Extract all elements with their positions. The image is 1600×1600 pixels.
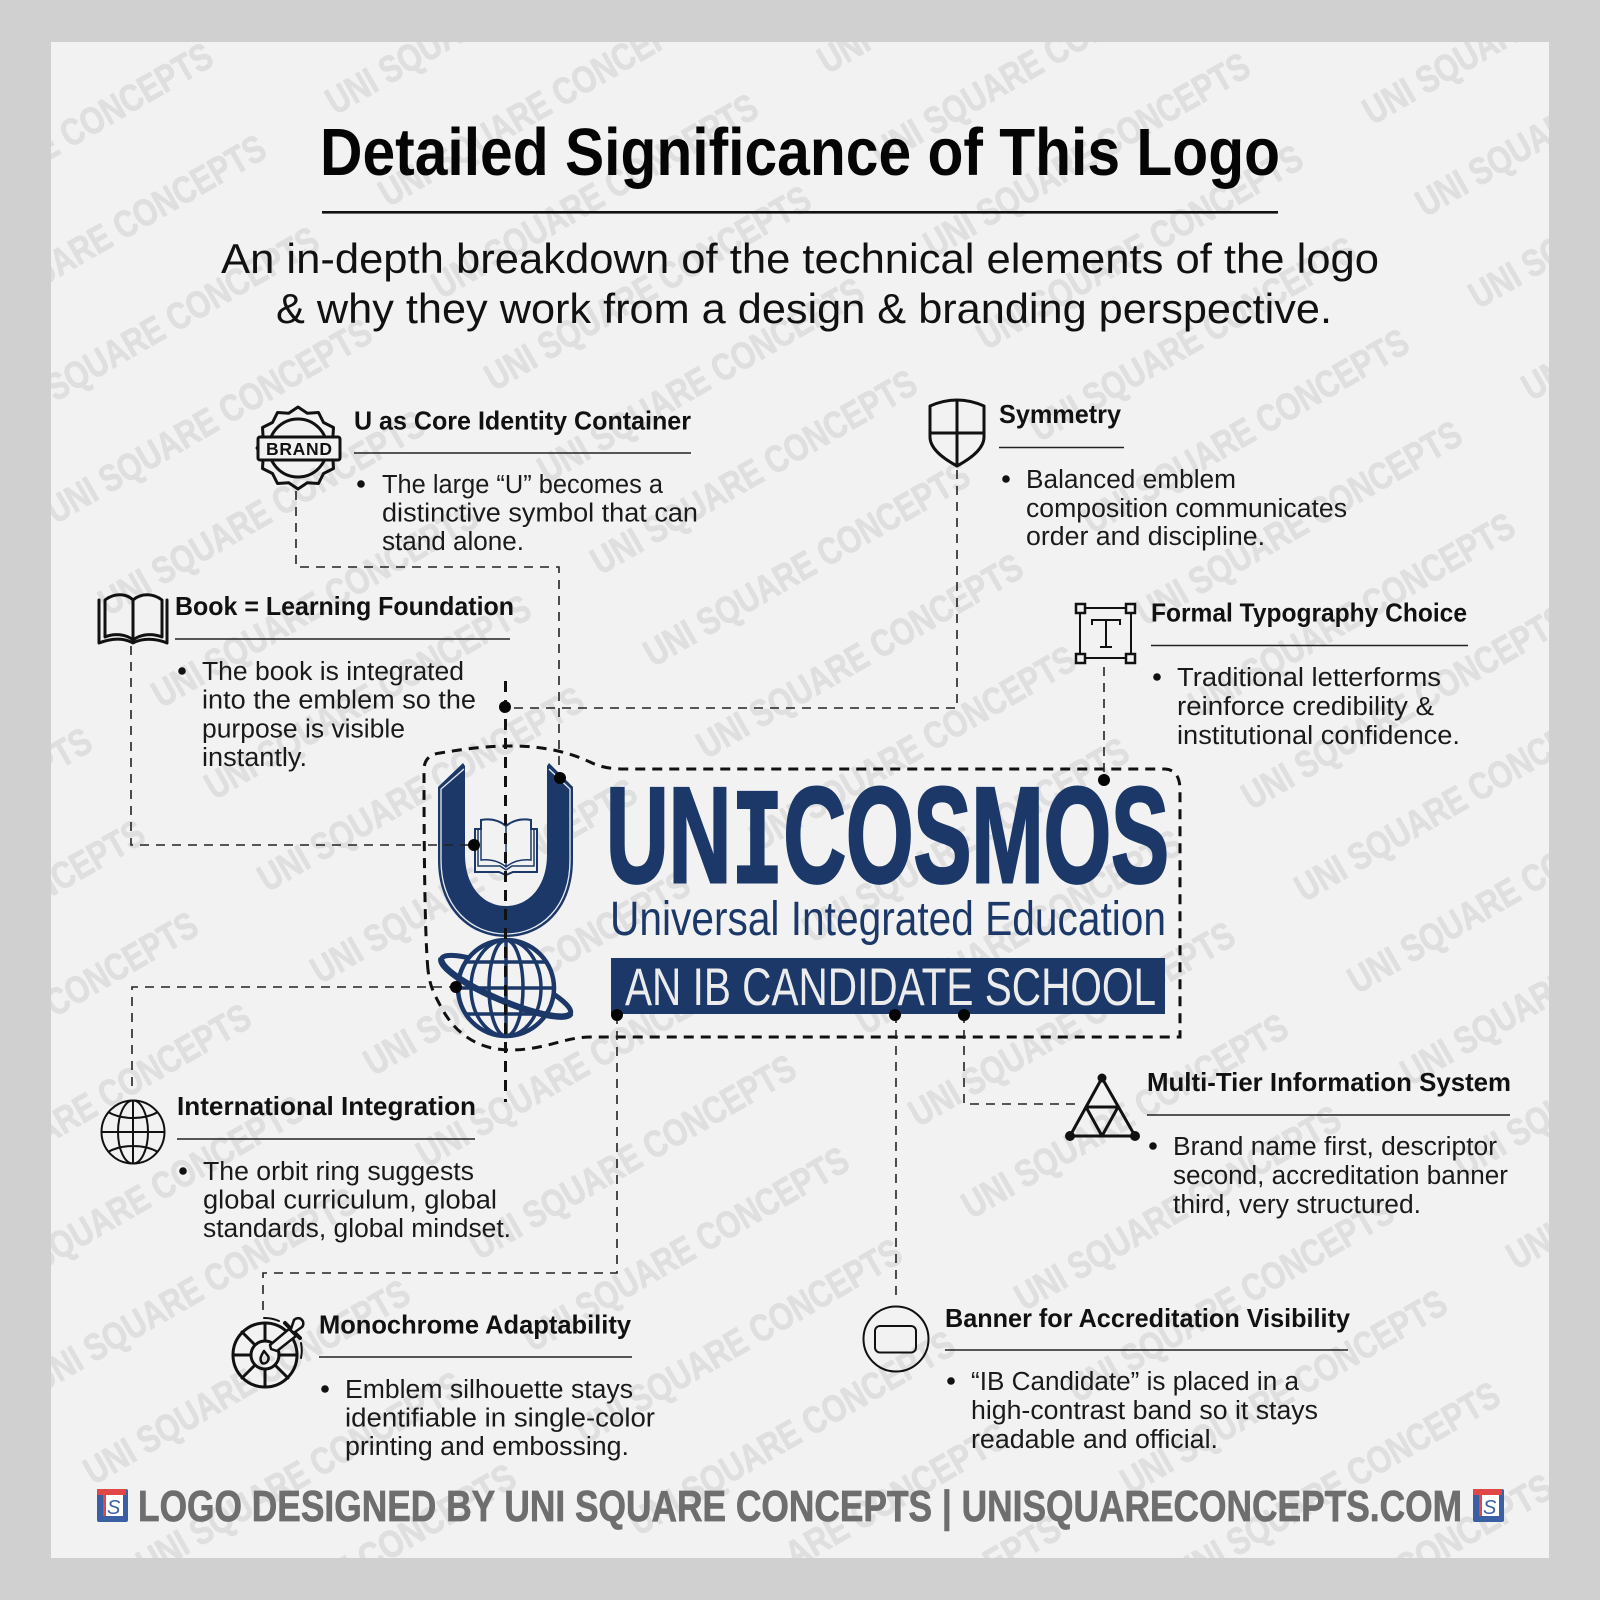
emblem: open book: [475, 819, 537, 875]
heading: Multi-Tier Information System: [1147, 1067, 1511, 1097]
subtitle: An in-depth breakdown of the technical elements of the logo: [221, 235, 1379, 282]
centre axis: [504, 681, 507, 1102]
bullet text: The large “U” becomes a: [382, 471, 664, 499]
callout: Multi-Tier Information System: [1065, 1067, 1511, 1219]
watermark pattern: UNI SQUARE CONCEPTS: [1129, 413, 1470, 634]
bullet text: standards, global mindset.: [203, 1215, 511, 1243]
watermark pattern: UNI SQUARE CONCEPTS: [622, 1323, 962, 1544]
bullet text: purpose is visible: [202, 715, 405, 743]
watermark pattern: UNI SQUARE CONCEPTS: [357, 863, 698, 1084]
bullet text: institutional confidence.: [1177, 722, 1460, 750]
bullet text: readable and official.: [971, 1426, 1218, 1454]
watermark pattern: UNI SQUARE CONCEPTS: [463, 1047, 804, 1268]
wordmark: UNICOSMOS: UNICOSMOS: [606, 759, 1169, 923]
watermark pattern: UNI SQUARE CONCEPTS: [690, 546, 1030, 767]
watermark pattern: UNI SQUARE CONCEPTS: [849, 822, 1190, 1043]
watermark pattern: UNI SQUARE CONCEPTS: [637, 454, 978, 675]
watermark pattern: UNI SQUARE CONCEPTS: [584, 362, 924, 583]
watermark pattern: UNI SQUARE CONCEPTS: [251, 679, 592, 900]
icon: colour wheel with dropper: [233, 1318, 303, 1387]
callout: Book = Learning Foundation: [99, 591, 514, 772]
watermark pattern: UNI SQUARE CONCEPTS: [1061, 1190, 1402, 1411]
watermark pattern: UNI SQUARE CONCEPTS: [1167, 1374, 1508, 1595]
callout: Monochrome Adaptability: [233, 1310, 656, 1461]
bullet text: into the emblem so the: [202, 687, 476, 715]
watermark pattern: UNI SQUARE CONCEPTS: [304, 771, 644, 992]
bullet text: [1153, 664, 1460, 750]
watermark pattern: UNI SQUARE CONCEPTS: [1076, 321, 1416, 542]
watermark pattern: UNI SQUARE CONCEPTS: [1114, 1282, 1454, 1503]
watermark pattern: UNI SQUARE CONCEPTS: [410, 955, 750, 1176]
bullet text: composition communicates: [1026, 495, 1347, 523]
icon: type frame: [1076, 604, 1135, 663]
bullet text: Emblem silhouette stays: [345, 1376, 633, 1404]
title: Detailed Significance of This Logo: [320, 115, 1280, 190]
watermark pattern: CONCEPTS: [1388, 1466, 1560, 1590]
watermark pattern: UNI SQUARE CONCEPTS: [478, 178, 818, 399]
watermark pattern: UNI SQUARE CONCEPTS: [743, 638, 1084, 859]
heading: Monochrome Adaptability: [319, 1310, 632, 1340]
heading: Banner for Accreditation Visibility: [945, 1303, 1351, 1333]
logo: [436, 759, 1169, 1036]
watermark pattern: UNI SQUARE CONCEPTS: [92, 403, 432, 624]
bullet text: Brand name first, descriptor: [1173, 1133, 1498, 1161]
watermark pattern: UNI SQUARE CONCEPTS: [145, 495, 486, 716]
bullet text: printing and embossing.: [345, 1433, 629, 1461]
bullet text: Traditional letterforms: [1177, 664, 1441, 692]
icon: brand badge: BRAND: [266, 439, 332, 459]
bullet text: [178, 658, 476, 772]
icon: right square mark: [1473, 1489, 1504, 1522]
bullet text: Balanced emblem: [1026, 466, 1236, 494]
descriptor line: Universal Integrated Education: [610, 893, 1166, 946]
watermark pattern: UNI SQUARE CONCEPTS: [130, 1364, 470, 1585]
bullet text: [947, 1368, 1318, 1454]
bullet text: second, accreditation banner: [1173, 1162, 1509, 1190]
subtitle: [221, 235, 1379, 332]
watermark pattern: UNI SQUARE CONCEPTS: [198, 587, 538, 808]
bullet text: global curriculum, global: [203, 1186, 497, 1214]
watermark pattern: UNI SQUARE CONCEPTS: [77, 1272, 418, 1493]
bullet text: The book is integrated: [202, 658, 464, 686]
callout: International Integration: [102, 1091, 511, 1243]
callout: Banner for Accreditation Visibility: [864, 1303, 1351, 1454]
bullet text: [1149, 1133, 1509, 1219]
watermark pattern: EPTS: [976, 1507, 1068, 1585]
icon: tiered triangle: [1065, 1074, 1140, 1141]
bullet text: “IB Candidate” is placed in a: [971, 1368, 1300, 1396]
heading: Book = Learning Foundation: [175, 591, 514, 621]
title underline: [322, 211, 1278, 214]
bullet text: order and discipline.: [1026, 523, 1265, 551]
emblem: globe with orbit ring: [436, 940, 576, 1036]
icon: brand badge: [257, 407, 340, 489]
bullet text: The orbit ring suggests: [203, 1158, 474, 1186]
bullet text: high-contrast band so it stays: [971, 1397, 1318, 1425]
callout: Symmetry: [930, 399, 1347, 551]
watermark pattern: UNI SQUARE CONCEPTS: [425, 86, 766, 307]
icon: open book: [99, 595, 167, 643]
bullet text: third, very structured.: [1173, 1191, 1421, 1219]
icon: banner in circle: [864, 1306, 928, 1372]
logo dashed outline: [424, 746, 1180, 1050]
bullet text: reinforce credibility &: [1177, 693, 1434, 721]
icon: globe: [102, 1100, 164, 1164]
anchor dots: [450, 701, 1110, 1021]
heading: U as Core Identity Container: [354, 406, 691, 436]
connector lines: [131, 470, 1104, 1310]
emblem: U: [438, 763, 573, 937]
bullet text: identifiable in single-color: [345, 1404, 656, 1432]
subtitle: & why they work from a design & branding perspective.: [276, 285, 1332, 332]
watermark pattern: UNI SQUARE CONCEPTS: [1182, 505, 1522, 726]
banner: AN IB CANDIDATE SCHOOL: [625, 958, 1156, 1017]
watermark pattern: UNI SQUARE CONCEPTS: [917, 45, 1258, 266]
watermark pattern: UNI SQUARE CONCEPTS: [796, 730, 1136, 951]
heading: Symmetry: [999, 399, 1122, 429]
icon: left square mark: S: [107, 1497, 121, 1519]
watermark pattern: UNI SQUARE CONCEPTS: [39, 311, 380, 532]
callout: U as Core Identity Container: [257, 406, 698, 556]
watermark pattern: UNI SQUARE CONCEPTS: [516, 1139, 856, 1360]
bullet text: distinctive symbol that can: [382, 500, 698, 528]
watermark pattern: ARE CONCEPTS: [778, 1415, 1016, 1577]
bullet text: [321, 1376, 656, 1461]
watermark pattern: UNI SQUARE CONCEPTS: [955, 1006, 1296, 1227]
watermark pattern: UNI SQUARE CONCEPTS: [1008, 1098, 1348, 1319]
watermark pattern: UNI SQUARE CONCEPTS: [970, 137, 1310, 358]
bullet text: [179, 1158, 511, 1243]
callout: Formal Typography Choice: [1076, 598, 1468, 750]
watermark pattern: UNI SQUARE CONCEPTS: [24, 1180, 364, 1401]
bullet text: [357, 471, 698, 556]
footer: [97, 1483, 1504, 1532]
bullet text: instantly.: [202, 744, 307, 772]
watermark pattern: UNI SQUARE CONCEPTS: [1023, 229, 1364, 450]
icon: left square mark: [97, 1489, 128, 1522]
heading: International Integration: [177, 1091, 476, 1121]
watermark pattern: UNI SQUARE CONCEPTS: [902, 914, 1242, 1135]
icon: shield: [930, 400, 984, 466]
heading: Formal Typography Choice: [1151, 598, 1467, 628]
bullet text: [1002, 466, 1347, 551]
bullet text: stand alone.: [382, 528, 524, 556]
watermark pattern: UNI SQUARE CONCEPTS: [531, 270, 872, 491]
watermark pattern: E CONCEPTS: [325, 1456, 524, 1595]
icon: right square mark: S: [1483, 1497, 1497, 1519]
watermark pattern: UNI SQUARE CONCEPTS: [569, 1231, 910, 1452]
